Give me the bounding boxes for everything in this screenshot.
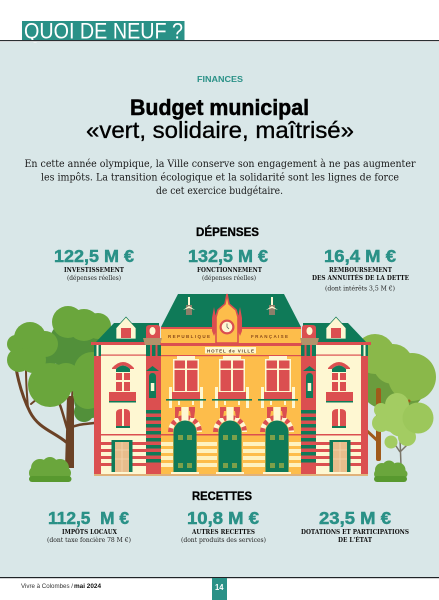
intro text: les impôts. La transition écologique et la solidarité sont les lignes de force bbox=[41, 172, 399, 184]
stat: impôts locaux: (dont taxe foncière 78 M €) bbox=[47, 537, 131, 544]
roof chimneys bbox=[183, 297, 278, 315]
hôtel de ville sign: HOTEL de VILLE bbox=[207, 348, 254, 353]
facade inscriptions: REPUBLIQUE bbox=[168, 334, 210, 339]
illustration: right tree bbox=[355, 334, 436, 461]
heading: dépenses: DÉPENSES bbox=[196, 224, 259, 239]
main roof bbox=[161, 294, 301, 327]
facade inscriptions bbox=[168, 334, 288, 339]
header tab: section title: QUOI DE NEUF ? bbox=[24, 18, 183, 44]
left wing bbox=[91, 317, 162, 474]
stat: fonctionnement: 132,5 M € bbox=[188, 246, 268, 266]
stat: impôts locaux: IMPÔTS LOCAUX bbox=[62, 528, 117, 536]
page number: 14 bbox=[215, 583, 224, 592]
stat: autres recettes: (dont produits des services) bbox=[181, 537, 266, 544]
illustration: small light tree bbox=[372, 393, 434, 466]
intro text: de cet exercice budgétaire. bbox=[156, 185, 283, 197]
stat: impôts locaux: 112,5 M € bbox=[48, 508, 129, 528]
footer credit: mai 2024 bbox=[74, 584, 102, 590]
intro text bbox=[24, 158, 416, 197]
stat: remboursement: REMBOURSEMENT bbox=[329, 267, 392, 274]
stat: autres recettes: 10,8 M € bbox=[187, 508, 259, 528]
stat: dotations: DE L'ÉTAT bbox=[338, 536, 372, 544]
stat: autres recettes bbox=[181, 508, 266, 544]
stat: investissement: INVESTISSEMENT bbox=[64, 267, 124, 274]
facade inscriptions: FRANÇAISE bbox=[251, 334, 288, 339]
stat: dotations: DOTATIONS ET PARTICIPATIONS bbox=[301, 529, 409, 536]
title bbox=[86, 95, 354, 143]
kicker: finances: FINANCES bbox=[197, 75, 244, 84]
stat: remboursement bbox=[312, 246, 409, 292]
title: «vert, solidaire, maîtrisé» bbox=[86, 117, 354, 143]
footer credit: Vivre à Colombes / bbox=[21, 584, 73, 590]
stat: remboursement: (dont intérêts 3,5 M €) bbox=[325, 286, 395, 292]
illustration: right bush bbox=[374, 460, 408, 482]
stat: remboursement: DES ANNUITÉS DE LA DETTE bbox=[312, 274, 409, 282]
stat: remboursement: 16,4 M € bbox=[324, 246, 396, 266]
stat: dotations bbox=[301, 508, 409, 544]
base line bbox=[94, 474, 368, 476]
footer credit bbox=[21, 584, 102, 590]
stat: investissement: 122,5 M € bbox=[54, 246, 134, 266]
arched doors bbox=[170, 407, 292, 474]
stat: dotations: 23,5 M € bbox=[319, 508, 391, 528]
page number bbox=[212, 578, 227, 600]
illustration: town hall bbox=[91, 294, 371, 476]
stat: fonctionnement: FONCTIONNEMENT bbox=[197, 267, 263, 274]
central windows bbox=[166, 356, 298, 408]
title: Budget municipal bbox=[130, 95, 309, 120]
stat: impôts locaux bbox=[47, 508, 131, 544]
stat: autres recettes: AUTRES RECETTES bbox=[191, 529, 255, 536]
stat: fonctionnement: (dépenses réelles) bbox=[202, 275, 256, 282]
intro text: En cette année olympique, la Ville conserve son engagement à ne pas augmenter bbox=[24, 158, 416, 170]
stat: investissement bbox=[54, 246, 134, 282]
clock pediment bbox=[212, 294, 242, 343]
stat: investissement: (dépenses réelles) bbox=[67, 275, 121, 282]
heading: recettes: RECETTES bbox=[192, 489, 252, 503]
cream steps bbox=[161, 442, 301, 467]
yellow facade bbox=[161, 327, 301, 474]
illustration: left bush bbox=[29, 457, 72, 482]
right wing bbox=[300, 317, 371, 474]
illustration: left tree bbox=[7, 306, 111, 468]
stat: fonctionnement bbox=[188, 246, 268, 282]
